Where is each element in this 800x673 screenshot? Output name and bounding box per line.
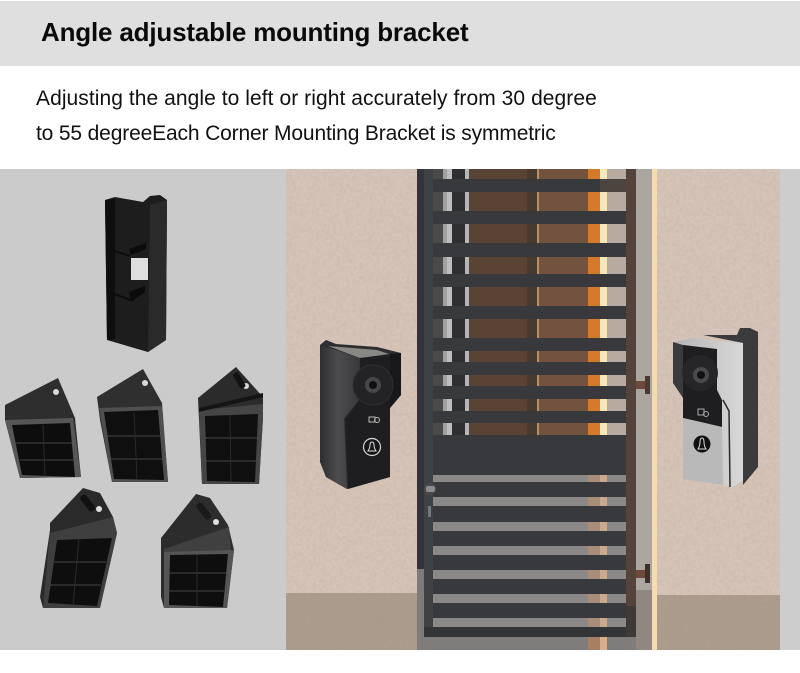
upper hinge <box>636 376 650 394</box>
latch <box>424 483 436 517</box>
left gray panel <box>0 169 286 650</box>
view through lower slats <box>433 473 626 627</box>
lower hinge <box>636 564 650 583</box>
description text <box>36 87 597 145</box>
doorbell: silver, right <box>673 328 758 488</box>
doorbell: black, left <box>320 340 401 489</box>
door jamb light strip <box>636 169 657 650</box>
bracket: angle 2 <box>97 369 168 482</box>
bracket: angle 1 <box>5 378 81 478</box>
view through upper slats <box>433 169 626 435</box>
upper right tint <box>600 179 626 192</box>
bracket: angle 5 <box>161 494 234 608</box>
wall scene <box>286 169 780 650</box>
header band <box>0 1 800 66</box>
bracket: angle 4 <box>40 488 117 608</box>
description text: to 55 degreeEach Corner Mounting Bracket is symmetric <box>36 122 556 145</box>
bracket: upright <box>105 195 167 352</box>
description text: Adjusting the angle to left or right accurately from 30 degree <box>36 87 597 110</box>
ground under gate <box>417 569 636 650</box>
right gray strip <box>780 169 800 650</box>
gate frame <box>417 169 636 637</box>
title: Angle adjustable mounting bracket <box>41 17 468 47</box>
bracket: angle 3 <box>198 367 263 484</box>
slats <box>433 179 626 618</box>
gate <box>417 169 650 650</box>
